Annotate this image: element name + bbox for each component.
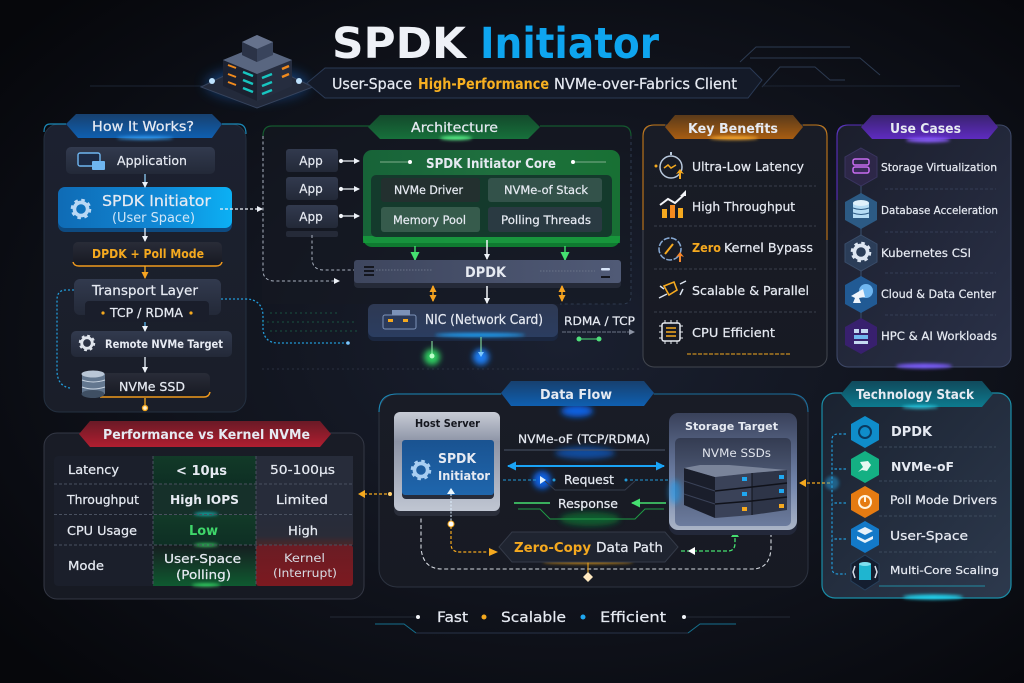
row: mode: Mode (68, 558, 104, 573)
decorative circuit lines top right (90, 47, 960, 87)
row: cpu usage (67, 523, 318, 539)
connector: spdk to architecture (220, 208, 262, 210)
host server: SPDK (438, 452, 477, 467)
panel: architecture (262, 115, 640, 369)
subtitle banner: High-Performance (418, 75, 549, 93)
use case: storage virtualization (845, 148, 997, 186)
tech: poll mode drivers: Poll Mode Drivers (890, 493, 997, 507)
step: nvme ssd: NVMe SSD (119, 379, 185, 394)
row: latency (68, 462, 335, 479)
title: Initiator (480, 19, 660, 69)
tech: multi-core scaling (851, 555, 999, 590)
heading: data flow (501, 381, 654, 406)
heading: use cases (861, 115, 998, 142)
use case: storage virtualization: Storage Virtualization (881, 161, 997, 174)
footer tagline: Efficient (600, 610, 667, 626)
server stack (684, 465, 787, 518)
dividers (885, 189, 996, 315)
row: mode: Kernel (284, 551, 325, 565)
heading: key benefits (665, 115, 803, 140)
panel: data flow (379, 381, 808, 587)
panel: how it works (44, 114, 246, 412)
host server: Host Server (415, 417, 481, 430)
core module: nvme driver (381, 178, 480, 202)
storage target: Storage Target (685, 420, 778, 433)
arrow: tcp/rdma bidirectional (508, 465, 664, 467)
zero-copy label: Data Path (596, 541, 663, 556)
tech: user-space: User-Space (890, 529, 968, 543)
use case: hpc and ai workloads: HPC & AI Workloads (881, 329, 997, 343)
benefit: cpu efficient (659, 320, 775, 344)
row: mode: (Polling) (176, 568, 231, 582)
connector: transport to nic (221, 299, 360, 345)
host server: Initiator (438, 469, 490, 483)
row: cpu usage: High (288, 523, 318, 538)
step: application: Application (117, 154, 187, 168)
subtitle banner: NVMe-over-Fabrics Client (554, 75, 737, 93)
core module: polling threads (488, 207, 602, 232)
heading: use cases: Use Cases (890, 122, 961, 137)
tech: dpdk: DPDK (891, 425, 933, 440)
step: nvme ssd (82, 370, 210, 398)
core module: polling threads: Polling Threads (501, 213, 591, 227)
use case: kubernetes csi: Kubernetes CSI (881, 246, 971, 260)
footer tagline: Fast (437, 610, 469, 626)
storage target: NVMe SSDs (702, 446, 771, 460)
benefit: cpu efficient: CPU Efficient (692, 325, 775, 340)
title: SPDK (332, 19, 468, 69)
tech: poll mode drivers (851, 486, 997, 518)
heading: how it works: How It Works? (92, 120, 194, 135)
footer tagline (330, 610, 790, 633)
rdma / tcp label (562, 314, 635, 342)
heading: architecture: Architecture (411, 121, 498, 136)
zero-copy label (499, 532, 678, 562)
use case: cloud and data center (845, 276, 996, 313)
use case: kubernetes csi (845, 235, 971, 271)
subtitle banner (307, 68, 762, 98)
heading: key benefits: Key Benefits (688, 122, 778, 137)
benefit: ultra-low latency (654, 152, 805, 179)
spdk initiator core (363, 150, 620, 247)
step: remote nvme target (71, 331, 232, 357)
link paths under boxes (421, 512, 771, 582)
benefit: zero kernel bypass: Zero (692, 240, 721, 255)
row: mode: User-Space (164, 552, 241, 566)
benefit: high throughput: High Throughput (692, 199, 795, 214)
step: dpdk poll mode: DPDK + Poll Mode (92, 246, 204, 261)
core module: memory pool: Memory Pool (393, 213, 466, 227)
app arrows (340, 160, 359, 218)
use case: database acceleration: Database Acceleration (881, 204, 998, 217)
core to dpdk arrows (415, 240, 565, 260)
panel: key benefits (643, 115, 827, 367)
heading: performance: Performance vs Kernel NVMe (103, 428, 310, 443)
core module: nvme driver: NVMe Driver (394, 183, 463, 197)
panel: technology stack (799, 381, 1011, 600)
response lane (514, 497, 666, 519)
row: mode (68, 551, 337, 582)
row: mode: (Interrupt) (273, 566, 337, 580)
footer tagline: Scalable (501, 610, 566, 626)
heading: technology stack: Technology Stack (856, 388, 974, 403)
step: dpdk poll mode (73, 242, 222, 266)
app boxes: App (299, 210, 323, 224)
nic card (368, 304, 558, 341)
use case: database acceleration (845, 193, 998, 229)
step: application (66, 147, 215, 174)
benefit: zero kernel bypass: Kernel Bypass (724, 240, 813, 255)
header: server icon (201, 35, 313, 108)
tech: nvme-of: NVMe-oF (891, 459, 954, 474)
nic output glows (424, 337, 489, 365)
benefit: ultra-low latency: Ultra-Low Latency (692, 159, 805, 174)
heading: how it works (66, 114, 222, 140)
rdma / tcp label: RDMA / TCP (564, 314, 635, 328)
bracket connector (799, 434, 846, 574)
panel: use cases (837, 115, 1011, 368)
benefit: scalable and parallel: Scalable & Parallel (692, 283, 809, 298)
step: transport layer: TCP / RDMA (109, 305, 183, 320)
heading: technology stack (841, 381, 993, 408)
core module: memory pool (381, 207, 480, 232)
nic card: NIC (Network Card) (425, 313, 543, 328)
flow arrows (142, 174, 148, 410)
nvme-of label and request response lanes (503, 432, 668, 519)
heading: architecture (368, 115, 540, 140)
row: latency: 50-100µs (270, 462, 335, 477)
core module: nvme-of stack (488, 178, 602, 202)
connector: data flow to performance (358, 490, 392, 498)
row: throughput: Throughput (66, 493, 139, 507)
app boxes: App (299, 154, 323, 168)
title (332, 19, 660, 69)
benefit: zero kernel bypass (659, 238, 813, 262)
dividers (654, 186, 816, 312)
dpdk bar (354, 260, 621, 288)
dividers (879, 447, 996, 552)
app boxes: App (299, 182, 323, 196)
row: cpu usage: Low (189, 524, 218, 539)
core module: nvme-of stack: NVMe-of Stack (504, 183, 588, 197)
tech: multi-core scaling: Multi-Core Scaling (890, 564, 999, 577)
tech: nvme-of (851, 451, 954, 483)
response lane: Response (558, 497, 618, 511)
use case: hpc and ai workloads (845, 318, 997, 354)
panel: performance vs kernel nvme (44, 421, 364, 599)
request lane (503, 471, 668, 490)
step: remote nvme target: Remote NVMe Target (105, 337, 223, 351)
step: spdk initiator (58, 187, 232, 232)
step: spdk initiator: (User Space) (112, 211, 195, 226)
row: throughput: Limited (276, 492, 328, 507)
zero-copy label: Zero-Copy (514, 541, 592, 556)
app to dpdk dashed link (312, 235, 354, 270)
row: throughput: High IOPS (170, 492, 239, 507)
comparison table (54, 456, 353, 586)
step: transport layer: Transport Layer (91, 284, 199, 299)
row: latency: < 10µs (176, 464, 227, 479)
step: transport layer (74, 279, 221, 322)
spdk initiator core: SPDK Initiator Core (426, 157, 556, 172)
subtitle banner: User-Space (332, 75, 412, 93)
benefit: high throughput (660, 190, 795, 218)
tech: dpdk (851, 416, 933, 448)
tech: user-space (851, 521, 968, 553)
benefit: scalable and parallel (659, 281, 809, 298)
storage target (669, 413, 797, 535)
heading: data flow: Data Flow (540, 388, 612, 403)
connector: transport loop left (57, 290, 74, 388)
heading: performance (79, 421, 331, 447)
row: latency: Latency (68, 463, 119, 477)
dpdk bar: DPDK (465, 265, 507, 281)
app boxes (286, 149, 338, 237)
step: spdk initiator: SPDK Initiator (102, 192, 212, 210)
nvme-of label and request response lanes: NVMe-oF (TCP/RDMA) (518, 432, 650, 446)
dpdk to nic arrows (433, 286, 562, 303)
host server (394, 412, 500, 527)
row: throughput (66, 492, 328, 507)
row: cpu usage: CPU Usage (67, 524, 137, 538)
use case: cloud and data center: Cloud & Data Center (881, 287, 996, 301)
request lane: Request (564, 473, 614, 487)
